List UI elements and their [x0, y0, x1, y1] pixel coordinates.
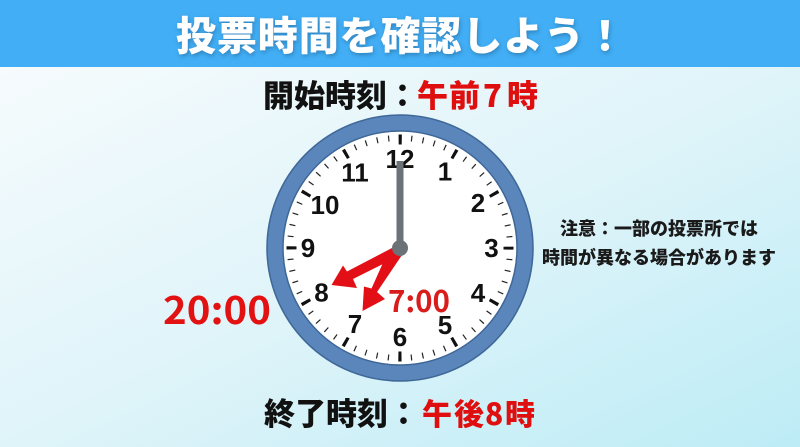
note text: 時間が異なる場合があります [542, 244, 776, 270]
clock numerals: 8 [314, 278, 329, 308]
start time heading: 開始時刻： [263, 71, 418, 116]
clock numerals: 7 [348, 309, 362, 339]
red arrow: 8 o'clock [332, 248, 399, 288]
start time heading [263, 71, 538, 116]
note text: 注意：一部の投票所では [560, 215, 758, 241]
clock rim [267, 115, 533, 381]
title banner [0, 0, 800, 67]
start time heading: 午前7時 [417, 71, 538, 116]
clock numerals: 12 [386, 144, 414, 174]
minute hand [396, 161, 404, 248]
end time heading: 終了時刻： [264, 389, 419, 434]
note text [542, 215, 776, 270]
clock numerals: 2 [471, 188, 485, 218]
clock numerals: 4 [471, 278, 486, 308]
end time heading [264, 389, 535, 434]
clock numerals: 6 [393, 322, 407, 352]
red arrow: 7 o'clock [362, 252, 404, 311]
hour ticks [292, 140, 508, 356]
clock hub [392, 240, 408, 256]
clock [267, 115, 533, 381]
minute ticks [290, 138, 510, 358]
7:00 label: 7:00 [388, 277, 450, 321]
title: 投票時間を確認しよう！ [176, 4, 625, 62]
clock numerals: 9 [301, 233, 315, 263]
clock numerals: 11 [341, 158, 369, 188]
clock numerals: 5 [438, 310, 452, 340]
clock numerals [301, 144, 499, 352]
clock numerals: 10 [311, 190, 339, 220]
end time heading: 午後8時 [422, 390, 535, 434]
20:00 label: 20:00 [163, 280, 271, 335]
clock numerals: 3 [484, 233, 499, 263]
clock numerals: 1 [438, 156, 452, 186]
